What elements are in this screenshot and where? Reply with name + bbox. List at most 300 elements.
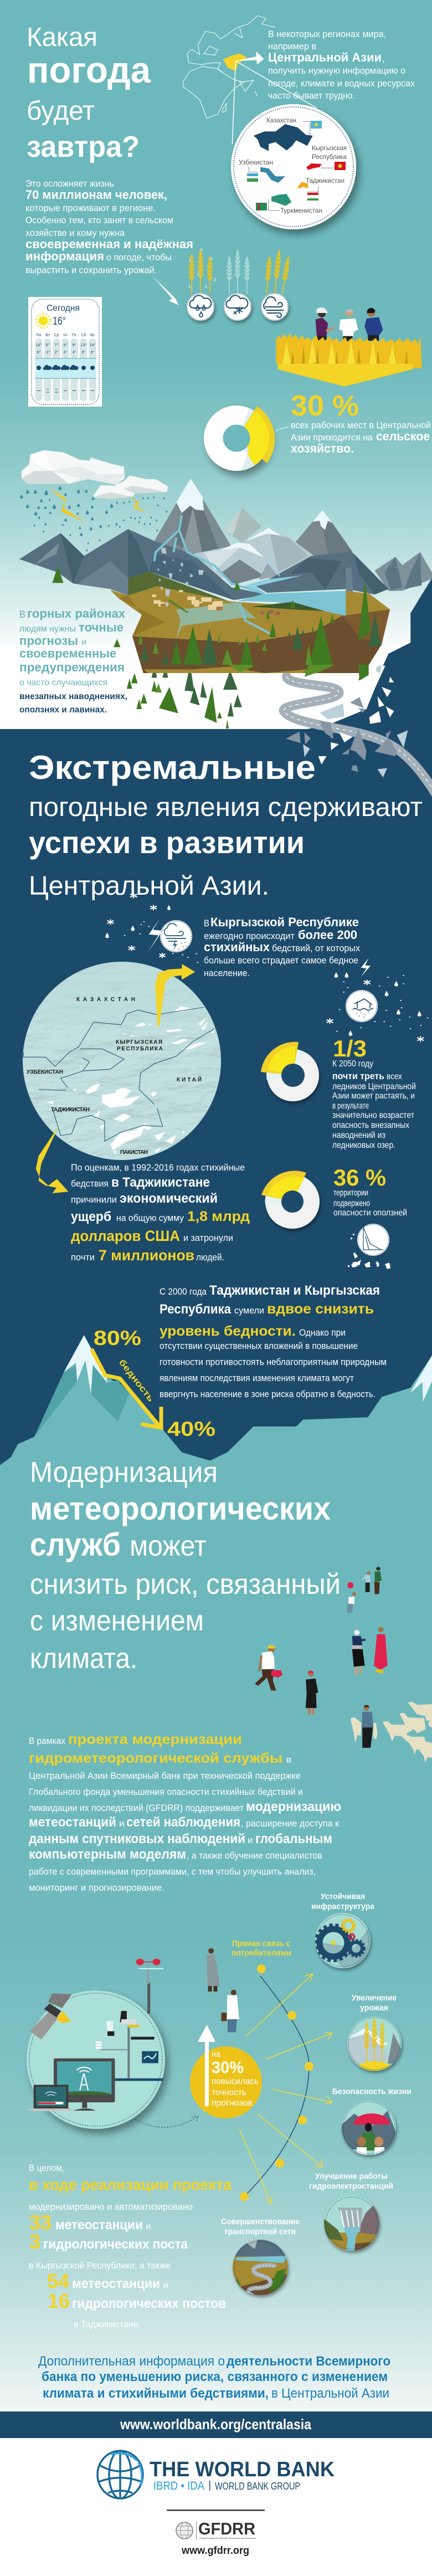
satellite (30, 1993, 71, 2040)
white footer background (0, 2438, 432, 2576)
text block: project results: метеостанции (55, 2218, 143, 2233)
text block: Kyrgyz Republic disasters: ежегодно происходит (204, 931, 295, 941)
stat: one third glaciers: значительно возрастет (332, 1111, 415, 1120)
title: Какая погода будет завтра: Какая (27, 23, 97, 52)
card: day names and temperatures: 9° (64, 343, 68, 347)
woman in red dress (374, 1627, 387, 1674)
card: day names and temperatures: 6° (82, 350, 86, 355)
card: day names and temperatures: Чт (63, 333, 68, 337)
country labels: Туркменистан (280, 207, 322, 214)
arrow: map to Tajikistan text (36, 1126, 68, 1193)
country labels: Кыргызская (312, 144, 347, 152)
text block: project description: , расширение доступа к (241, 1818, 340, 1829)
left dark mountains (19, 529, 268, 600)
stat: one third glaciers: почти треть (332, 1071, 384, 1081)
icon: snow (224, 293, 251, 321)
benefit labels: инфраструктура (311, 1902, 375, 1911)
card: day names and temperatures: Пн (37, 333, 42, 337)
map: country labels: КАЗАХСТАН (76, 997, 135, 1003)
donut: 30 percent (204, 406, 289, 471)
donut: 36 percent (261, 1171, 320, 1229)
benefit labels: Безопасность жизни (332, 2087, 412, 2096)
label: direct link with users: потребителями (232, 1948, 291, 1958)
circle: harvest (347, 2016, 402, 2074)
map: Central Asia region (223, 54, 246, 71)
floating forest (127, 665, 369, 728)
stat: one third glaciers: в результате (332, 1101, 369, 1111)
footer band with URL: www.worldbank.org/centralasia (120, 2416, 311, 2433)
stat: one third glaciers: всех (387, 1072, 402, 1081)
text block: project description: проекта модернизации (68, 1732, 242, 1747)
doctor (221, 1995, 239, 2032)
background: lower teal gradient (0, 1468, 432, 2411)
text block: Tajikistan damage: 1,8 млрд (187, 1209, 250, 1224)
text block: project description: Центральной Азии Всемирный банк при технической поддержке (29, 1771, 301, 1781)
icon: wind (261, 293, 289, 321)
benefit labels: Улучшение работы (315, 2172, 388, 2181)
desktop monitor (54, 2059, 115, 2111)
card: day names and temperatures: 16° (36, 343, 42, 347)
far right peaks (375, 552, 432, 591)
text block: Kyrgyz Republic disasters (204, 915, 360, 978)
stat: one third glaciers: Азии может растаять, и (332, 1091, 415, 1101)
text block: project results: гидрологических поста (43, 2237, 188, 2252)
text block: further information: банка по уменьшению риска, связанного с изменением (42, 2369, 388, 2384)
forest (53, 566, 371, 673)
text block: Tajikistan damage: на общую сумму (116, 1213, 184, 1223)
logo: GFDRR: Global Facility for Disaster Reduction and Recovery (199, 2537, 256, 2539)
text block: project description: и (119, 1818, 124, 1829)
text block: project description: данным спутниковых наблюдений (29, 1831, 245, 1846)
text block: Tajikistan damage (71, 1162, 250, 1264)
text block: poverty reduction: отсутствии существенных вложений в повышение (160, 1341, 358, 1351)
child with balloon (347, 1582, 356, 1613)
text block: poverty reduction: Таджикистан и Кыргызская (209, 1283, 380, 1298)
text block: further information: Дополнительная информация о (38, 2354, 225, 2369)
country labels (239, 116, 347, 214)
callout: text: точность (212, 2088, 246, 2097)
map: glaciers and borders (23, 1007, 215, 1108)
text block: poverty reduction: уровень бедности. (160, 1323, 296, 1339)
text block: Tajikistan damage: почти (71, 1252, 95, 1263)
card: day names and temperatures: 4° (64, 350, 68, 355)
text block: project results: 54 (47, 2270, 69, 2292)
background: navy section (0, 729, 432, 1481)
heading: modernization: климата. (30, 1643, 137, 1675)
anemometer (136, 1959, 163, 1984)
text block: Central Asia intro: , (382, 53, 385, 64)
man in blue shirt (362, 1705, 373, 1748)
card: day names and temperatures: Пт (72, 333, 77, 337)
background: white strip (0, 648, 432, 730)
woman in dark dress (352, 1630, 366, 1675)
card: day names and temperatures (36, 333, 95, 393)
mountain landscape (19, 450, 432, 673)
navy cliff upper part (383, 578, 432, 666)
text block: project results: в Таджикистане. (74, 2319, 141, 2329)
poverty labels: бедность (117, 1358, 156, 1404)
text block: project description: В рамках (29, 1736, 65, 1746)
text block: Kyrgyz Republic disasters: стихийных (204, 940, 270, 954)
card: day names and temperatures: 10 (55, 388, 58, 391)
text block: project description: компьютерным моделям (29, 1847, 186, 1862)
card: day names and temperatures: Сб (81, 333, 86, 337)
wheat field (276, 333, 422, 368)
circle: safety of life (342, 2101, 396, 2156)
text block: Tajikistan damage: людей. (196, 1252, 224, 1263)
village (152, 590, 280, 615)
callout: 30 percent accuracy (190, 2025, 262, 2118)
card: day names and temperatures: мм (46, 391, 49, 393)
heading: extreme weather: Экстремальные (29, 749, 316, 786)
weather scatter around storm icon (105, 893, 429, 1042)
url: gfdrr.org: www.gfdrr.org (181, 2545, 249, 2557)
card: day names and temperatures: 20 (47, 388, 49, 391)
text block: poverty reduction: С 2000 года (160, 1286, 207, 1297)
text block: poverty reduction: ввергнуть население в зоне риска обратно в бедность. (160, 1389, 376, 1399)
navy cliff (306, 665, 432, 730)
text block: poverty reduction: Республика (160, 1302, 232, 1317)
rock fragments on navy (286, 721, 397, 772)
text block: project results: и (146, 2221, 151, 2231)
ground (110, 586, 390, 643)
farmer 2 (339, 309, 358, 342)
text block: poverty reduction: явлениям последствия изменения климата могут (160, 1373, 354, 1383)
peak snow (64, 1335, 107, 1394)
text block: project results: 16 (48, 2290, 70, 2312)
title: Какая погода будет завтра: завтра? (27, 130, 140, 163)
card: day names and temperatures: 9° (73, 343, 76, 347)
text block: project description: глобальным (255, 1831, 332, 1846)
heading: modernization: с изменением (30, 1605, 204, 1637)
card: temperature: 16° (53, 315, 66, 327)
people illustrations (255, 1567, 432, 1763)
map: country labels: ТАДЖИКИСТАН (51, 1107, 90, 1113)
text block: mountain warnings: и (81, 638, 86, 647)
text block: project description: в (286, 1754, 291, 1765)
text block: 70 million people: о погоде, чтобы (106, 252, 172, 263)
text block: 70 million people: хозяйстве и кому нужна (25, 228, 125, 238)
text block: project results: модернизировано и автоматизировано (29, 2202, 193, 2212)
benefit labels (221, 1892, 412, 2236)
flag: Kazakhstan (311, 121, 322, 129)
text block: project description: работе с современными программами, с тем чтобы улучшить анализ, (29, 1866, 316, 1877)
rock slide fragments (157, 547, 204, 607)
heading: extreme weather (29, 749, 423, 901)
panel: countries circle (231, 104, 356, 229)
map: country labels: ПАКИСТАН (120, 1150, 148, 1156)
pale snowy mountain (193, 528, 313, 578)
title: Какая погода будет завтра: будет (27, 96, 95, 126)
stat: 36 percent landslide: опасности оползней (333, 1208, 407, 1218)
gear yellow (342, 1919, 355, 1932)
stat: one third glaciers: наводнений из (332, 1131, 385, 1140)
card: day names and temperatures: 2° (55, 350, 59, 355)
text block: Tajikistan damage: в Таджикистане (111, 1175, 210, 1190)
benefit labels: Совершенствование (221, 2217, 300, 2226)
stat: 30 percent agriculture (291, 390, 431, 455)
text block: poverty reduction: готовности противостоять неблагоприятным природным (160, 1357, 387, 1367)
stat: one third glaciers: 1/3 (333, 1035, 367, 1061)
farmer 3 (364, 308, 383, 341)
text block: project results: гидрологических постов (72, 2296, 226, 2311)
heading: extreme weather: успехи в развитии (29, 825, 305, 860)
stat: 36 percent landslide: подвержено (333, 1199, 370, 1208)
text block: project description: модернизацию (246, 1799, 341, 1814)
card: day names and temperatures: мм (55, 391, 58, 393)
benefit labels: урожая (360, 2003, 388, 2013)
text block: project description: мониторинг и прогнозирование. (29, 1882, 164, 1893)
text block: project results: 33 (29, 2211, 52, 2234)
lightning bolts (49, 488, 147, 522)
text block: Kyrgyz Republic disasters: больше всего страдает самое бедное (204, 955, 358, 966)
heading: extreme weather: Центральной Азии. (29, 871, 269, 901)
heading: modernization: Модернизация (30, 1456, 218, 1489)
text block: project description: гидрометеорологической службы (29, 1751, 282, 1766)
icon: storm circle (160, 920, 192, 952)
heading: modernization: может (130, 1530, 207, 1562)
card: day names and temperatures: 14° (90, 343, 95, 347)
right dark mountains (256, 551, 385, 594)
logo: World Bank wordmark: THE WORLD BANK (150, 2458, 335, 2481)
text block: project results (29, 2163, 232, 2329)
stat: 30 percent agriculture: 30 % (291, 390, 359, 422)
poverty labels (94, 1327, 215, 1440)
dotted connector arrow (135, 2116, 198, 2127)
text block: Central Asia intro: В некоторых регионах мира, (268, 29, 386, 39)
flag: Uzbekistan (247, 173, 258, 182)
text block: project results: В целом, (29, 2163, 64, 2173)
text block: project results: в ходе реализации проекта (29, 2176, 232, 2193)
card: day names and temperatures: Вт (45, 333, 50, 337)
stat: one third glaciers: опасность внезапных (332, 1121, 409, 1130)
text block: mountain warnings: своевременные (19, 646, 116, 660)
circle: resilient infrastructure gears (315, 1913, 371, 1968)
text block: Tajikistan damage: экономический (120, 1191, 218, 1206)
country labels: Узбекистан (239, 158, 273, 166)
map: country labels: КЫРГЫЗСКАЯ (116, 1039, 162, 1045)
text block: Tajikistan damage: 7 миллионов (99, 1247, 194, 1264)
callout: text: 30% (212, 2059, 244, 2077)
text block: further information: деятельности Всемирного (227, 2354, 390, 2369)
text block: project description: Глобального фонда уменьшения опасности стихийных бедствий и (29, 1787, 303, 1797)
arrow: from text to weather icons (152, 276, 179, 305)
gear large (316, 1925, 351, 1961)
benefit labels: Увеличение (352, 1993, 397, 2003)
text block: 70 million people: Это осложняет жизнь (25, 178, 114, 189)
text block: poverty reduction: Однако при (299, 1327, 346, 1338)
text block: mountain warnings: горных районах (27, 607, 126, 620)
text block: project description: ликвидации их последствий (GFDRR) поддерживает (29, 1803, 244, 1813)
child in light shirt (362, 1571, 371, 1592)
relief map circle (23, 962, 221, 1161)
map: country labels (27, 997, 202, 1156)
benefit labels: транспортной сети (224, 2227, 296, 2236)
woman with red cap (306, 1671, 318, 1715)
gear red (348, 1933, 355, 1940)
text block: 70 million people: Особенно тем, кто занят в сельском (25, 215, 173, 225)
sheep flock (351, 1702, 432, 1763)
ground bottom edge (143, 665, 361, 673)
card: day names and temperatures: 7° (55, 343, 59, 347)
callout: text: прогнозов (212, 2098, 253, 2108)
text block: Tajikistan damage: долларов США (71, 1228, 180, 1244)
benefit labels: гидроэлектростанций (309, 2182, 393, 2191)
text block: Kyrgyz Republic disasters: В (204, 918, 209, 928)
card: weather icons (37, 365, 95, 370)
text block: Tajikistan damage: По оценкам, в 1992-2016 годах стихийные (71, 1162, 245, 1173)
flag: Kyrgyz Republic (335, 162, 346, 170)
farmers in wheat (276, 307, 422, 387)
icon: rain (187, 293, 214, 321)
card: day columns (35, 338, 96, 401)
wheat under wind (264, 249, 291, 294)
text block: 70 million people (25, 178, 193, 275)
callout: up arrow (198, 2025, 215, 2106)
logo: GFDRR (176, 2519, 256, 2539)
stat: 36 percent landslide (333, 1164, 407, 1218)
back peaks (223, 507, 262, 543)
stat: 30 percent agriculture: Азии приходится на (291, 432, 373, 443)
country shapes (249, 121, 335, 211)
text block: Central Asia intro: например в (268, 41, 316, 52)
arrow: white pointer to text (235, 52, 264, 65)
arrow: map to Kyrgyz text (155, 964, 195, 1027)
icon: flood house (346, 990, 378, 1022)
text block: Tajikistan damage: и затронули (183, 1233, 233, 1243)
logo: GFDRR: GFDRR (198, 2519, 255, 2538)
text block: project results: 3 (29, 2230, 40, 2253)
wheat under snow (227, 249, 250, 294)
text block: Central Asia intro (268, 29, 415, 101)
title: Какая погода будет завтра (27, 23, 151, 163)
teal mountain edge (0, 1335, 432, 1477)
world map with Central Asia highlighted (183, 16, 317, 144)
umbrella (353, 2113, 390, 2125)
card: day names and temperatures: 13° (81, 343, 86, 347)
text block: further information (38, 2354, 390, 2401)
text block: Tajikistan damage: бедствия (71, 1178, 109, 1189)
text block: 70 million people: информация (25, 249, 104, 263)
card: heading: Сегодня (47, 304, 80, 313)
text block: mountain warnings: точные (79, 620, 124, 634)
text block: 70 million people: 70 миллионам человек, (25, 188, 167, 202)
text block: project description: и (248, 1835, 253, 1845)
text block: Tajikistan damage: ущерб (71, 1209, 111, 1224)
yellow benefit arrows (239, 1974, 332, 2204)
text block: project description: метеостанций (29, 1815, 116, 1830)
heading: modernization: служб (30, 1527, 121, 1563)
stat: 30 percent agriculture: хозяйство. (291, 442, 354, 455)
country labels: Республика (312, 153, 347, 161)
wheat under rain (188, 247, 216, 294)
text block: mountain warnings: прогнозы (19, 634, 78, 648)
callout: text: повысилась (212, 2077, 259, 2086)
rain drops (20, 486, 167, 551)
text block: Tajikistan damage: причинили (71, 1194, 117, 1205)
divider rule (167, 2510, 265, 2511)
stat: one third glaciers (332, 1035, 416, 1150)
logo: World Bank wordmark: WORLD BANK GROUP (215, 2481, 300, 2492)
background: top teal to white gradient (0, 0, 432, 681)
text block: mountain warnings: людям нужны (19, 624, 76, 634)
country labels: Казахстан (266, 116, 296, 124)
stat: one third glaciers: ледниковых озер. (332, 1141, 395, 1150)
gear small navy (348, 1940, 364, 1957)
text block: poverty reduction: вдвое снизить (267, 1301, 374, 1317)
road (284, 677, 432, 798)
text block: poverty reduction (160, 1283, 387, 1399)
card: day names and temperatures: 6° (46, 343, 50, 347)
text block: mountain warnings: о часто случающихся (19, 678, 107, 687)
text block: project results: метеостанции (72, 2276, 160, 2291)
text block: mountain warnings: внезапных наводнениях, (19, 692, 127, 701)
footer band with URL (0, 2411, 432, 2438)
callout: text (212, 2050, 259, 2108)
lake and rivers (237, 591, 346, 616)
map: country labels: РЕСПУБЛИКА (117, 1046, 163, 1052)
panel: observation station circle (27, 1982, 165, 2129)
cliff and falling trees (127, 665, 432, 798)
text block: further information: в Центральной Азии (271, 2386, 389, 2401)
title: Какая погода будет завтра: погода (27, 49, 151, 90)
text block: mountain warnings: оползнях и лавинах. (19, 705, 107, 715)
arc with yellow milestones (240, 1964, 313, 2201)
benefit labels: Устойчивая (321, 1892, 365, 1901)
heading: extreme weather: погодные явления сдерживают (29, 793, 423, 822)
heading: modernization: метеорологических (30, 1491, 331, 1527)
label: direct link with users (232, 1939, 291, 1958)
text block: mountain warnings (19, 607, 127, 715)
text block: Kyrgyz Republic disasters: Кыргызской Республике (210, 915, 359, 929)
circle: hydropower dam (324, 2195, 382, 2255)
poverty labels: 40% (167, 1418, 215, 1440)
text block: project description: сетей наблюдения (126, 1815, 240, 1830)
woman in green (374, 1567, 382, 1594)
flag: Tajikistan (307, 193, 318, 201)
dark soil (132, 609, 390, 673)
text block: 70 million people: вырастить и сохранить урожай. (25, 265, 157, 275)
connector lines to circle (232, 61, 317, 144)
text block: poverty reduction: сумели (234, 1305, 264, 1316)
card: sun icon (36, 314, 50, 328)
text block: mountain warnings: В (19, 609, 25, 620)
heading: modernization (30, 1456, 341, 1675)
text block: Kyrgyz Republic disasters: более 200 (298, 928, 357, 942)
text block: Central Asia intro: получить нужную информацию о (268, 65, 405, 76)
text block: Central Asia intro: Центральной Азии (268, 50, 382, 64)
callout: text: на (212, 2050, 220, 2059)
stat: one third glaciers: К 2050 году (332, 1059, 373, 1069)
worker with red bag (255, 1645, 282, 1691)
card: day names and temperatures: Вс (90, 333, 95, 337)
logo: World Bank globe (97, 2451, 143, 2498)
card: day names and temperatures: 6° (91, 350, 95, 355)
text block: project results: в Кыргызской Республике, а также (29, 2260, 171, 2271)
text block: project description: , а также обучение специалистов (187, 1850, 322, 1861)
scientist (207, 1948, 236, 1995)
text block: project results: и (163, 2280, 168, 2290)
icon: landslide (348, 1224, 390, 1269)
card: day names and temperatures: Ср (54, 333, 59, 337)
country labels: Таджикистан (306, 177, 344, 184)
card: day names and temperatures: 4° (73, 350, 76, 355)
farmer 1 (316, 307, 335, 342)
heading: modernization: снизить риск, связанный (30, 1568, 341, 1600)
text block: Kyrgyz Republic disasters: бедствий, от которых (272, 943, 360, 953)
scientist and doctor (207, 1948, 239, 2032)
forecast card (28, 297, 102, 407)
